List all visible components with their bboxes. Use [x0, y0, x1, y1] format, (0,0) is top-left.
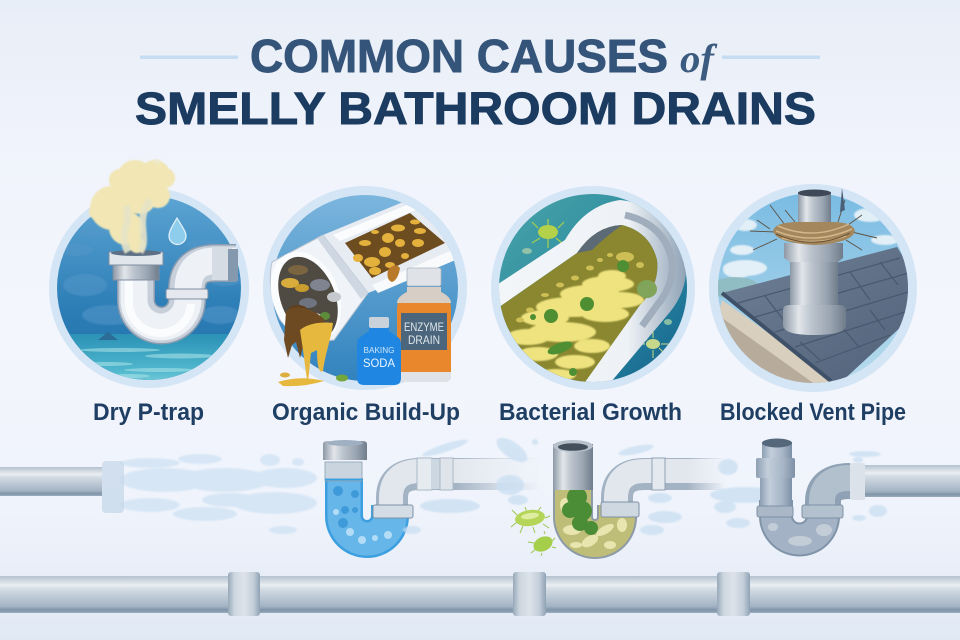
label: blocked vent pipe: Blocked Vent Pipe — [720, 399, 906, 426]
icon: bacteria-filled p-trap — [553, 440, 725, 550]
splashes between traps — [403, 433, 887, 535]
panel: organic build-up — [258, 186, 480, 390]
icon: enzyme bottle: DRAIN — [408, 333, 440, 347]
icon: baking soda bottle — [357, 317, 401, 385]
label: bacterial growth: Bacterial Growth — [499, 399, 682, 426]
bacteria outside pipe — [522, 219, 672, 358]
label: organic build-up: Organic Build-Up — [272, 399, 460, 426]
collar and mouth — [270, 235, 368, 341]
panel: dry p-trap — [49, 159, 250, 394]
icon: grey p-trap — [756, 438, 960, 546]
icon: blue water p-trap — [323, 440, 540, 544]
icon: p-trap pipe — [109, 247, 238, 333]
title: SMELLY BATHROOM DRAINS — [135, 83, 816, 134]
icon: enzyme bottle — [397, 268, 451, 382]
rim — [499, 200, 686, 382]
title: COMMON CAUSES — [250, 30, 668, 82]
icon: vent pipe — [783, 190, 846, 335]
panel: bacterial growth — [490, 186, 696, 395]
icon: enzyme bottle: ENZYME — [404, 320, 444, 334]
icon: nest — [750, 188, 877, 250]
slime drips — [284, 307, 325, 358]
slime channel — [495, 225, 657, 392]
label: dry p-trap: Dry P-trap — [93, 399, 204, 426]
panel: blocked vent pipe — [709, 184, 930, 395]
icon: smell cloud — [89, 159, 175, 253]
icon: baking soda bottle: BAKING — [364, 345, 394, 355]
title: of — [680, 36, 718, 81]
icon: baking soda bottle: SODA — [363, 356, 395, 370]
left pipe with water splash — [0, 454, 317, 534]
bottom pipe — [0, 572, 960, 616]
icon: water drop — [169, 218, 186, 244]
icon: bacteria pair — [511, 507, 556, 556]
title — [135, 30, 820, 134]
